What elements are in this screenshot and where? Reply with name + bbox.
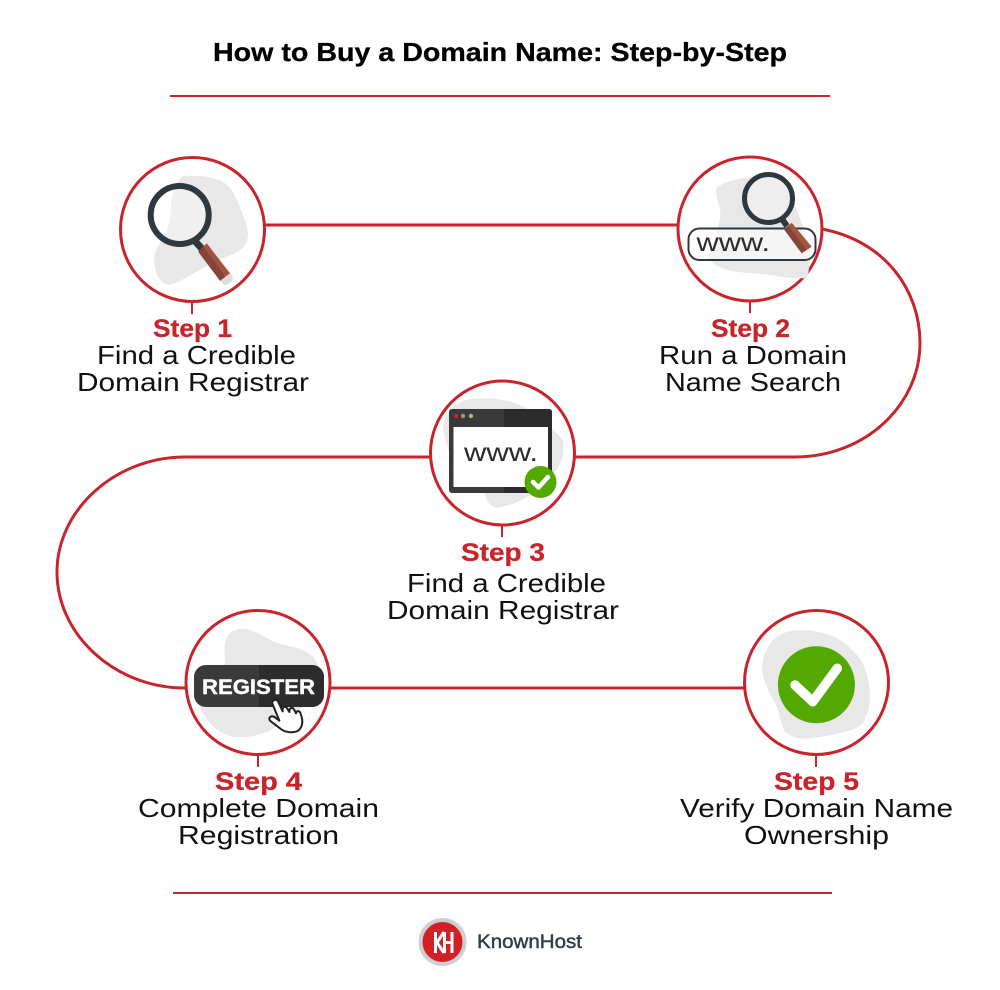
step 3 icon: browser window with check (430, 381, 574, 525)
KnownHost logo: KnownHost (477, 931, 583, 953)
step 4 icon: register button: REGISTER (202, 676, 315, 699)
step 1 text: Find a Credible (97, 340, 296, 370)
step 2 text (659, 315, 847, 397)
step 2 text: Name Search (665, 367, 841, 397)
step 1 icon: magnifying glass (120, 158, 264, 302)
step 3 text: Step 3 (461, 539, 545, 567)
step 3 text (387, 539, 619, 625)
step 2 text: Step 2 (711, 315, 790, 343)
step 5 text: Step 5 (774, 768, 859, 796)
step 1 text: Step 1 (153, 315, 232, 343)
step 2 text: Run a Domain (659, 340, 847, 370)
step 2 icon: www search bar (678, 157, 822, 301)
step 1 text (77, 315, 309, 397)
step 2 icon: www search bar: www. (695, 227, 770, 257)
step 5 text: Verify Domain Name (680, 793, 953, 823)
step 4 text: Registration (178, 820, 339, 850)
step 5 icon: green check (744, 610, 888, 754)
step 3 text: Find a Credible (407, 568, 606, 598)
step 1 text: Domain Registrar (77, 367, 309, 397)
step 3 icon: browser window with check: www. (463, 437, 538, 467)
step 4 icon: register button (186, 610, 330, 754)
KnownHost logo (420, 920, 583, 964)
connector path (57, 225, 920, 767)
title: How to Buy a Domain Name: Step-by-Step (213, 37, 787, 67)
step 4 text: Complete Domain (138, 793, 379, 823)
step 5 text: Ownership (744, 820, 889, 850)
step 4 text: Step 4 (215, 768, 302, 796)
icon: pointing hand (269, 700, 302, 732)
step 3 text: Domain Registrar (387, 595, 619, 625)
step 5 text (680, 768, 953, 850)
step 4 text (138, 768, 379, 850)
